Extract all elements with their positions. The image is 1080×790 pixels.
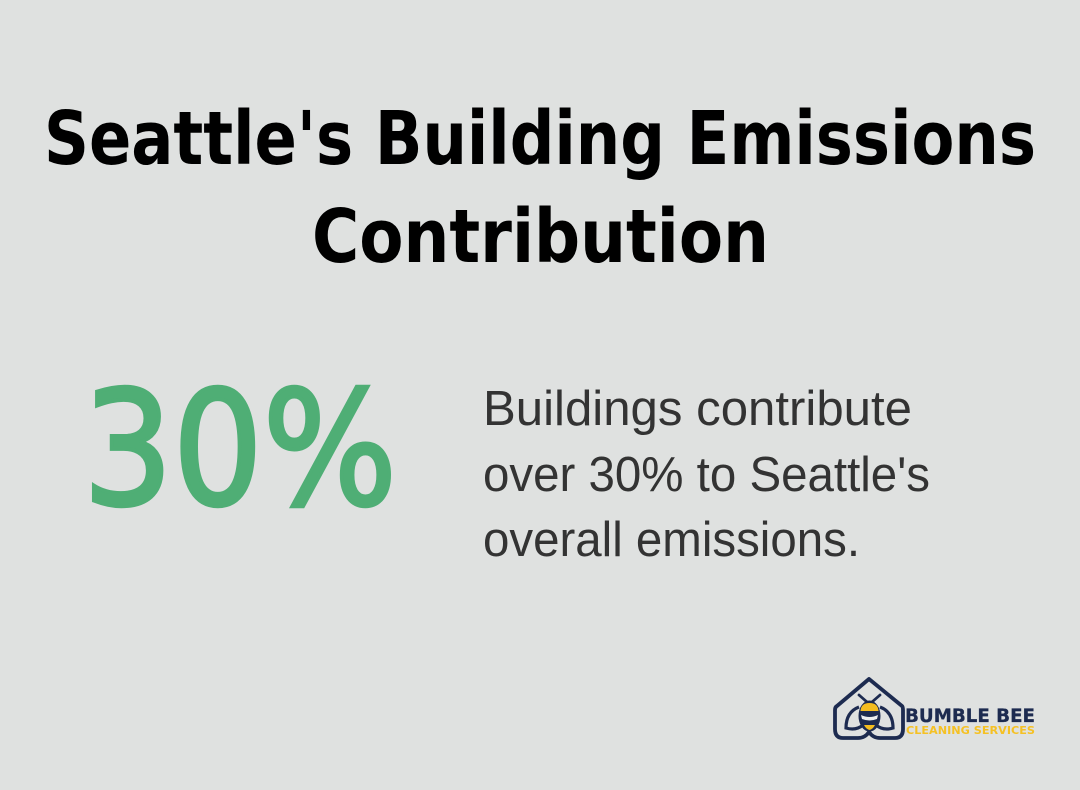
description text: over 30% to Seattle's	[483, 448, 930, 502]
icon: house outline with bee	[835, 679, 903, 738]
logo name: BUMBLE BEE	[905, 705, 1035, 727]
title	[44, 96, 1036, 280]
description text: Buildings contribute	[483, 382, 912, 436]
logo tagline: CLEANING SERVICES	[906, 724, 1035, 737]
description text	[483, 382, 930, 567]
big statistic: 30%: 30%	[83, 358, 397, 542]
title: Contribution	[312, 194, 769, 280]
description text: overall emissions.	[483, 513, 860, 567]
logo: Bumble Bee Cleaning Services	[835, 679, 1035, 738]
